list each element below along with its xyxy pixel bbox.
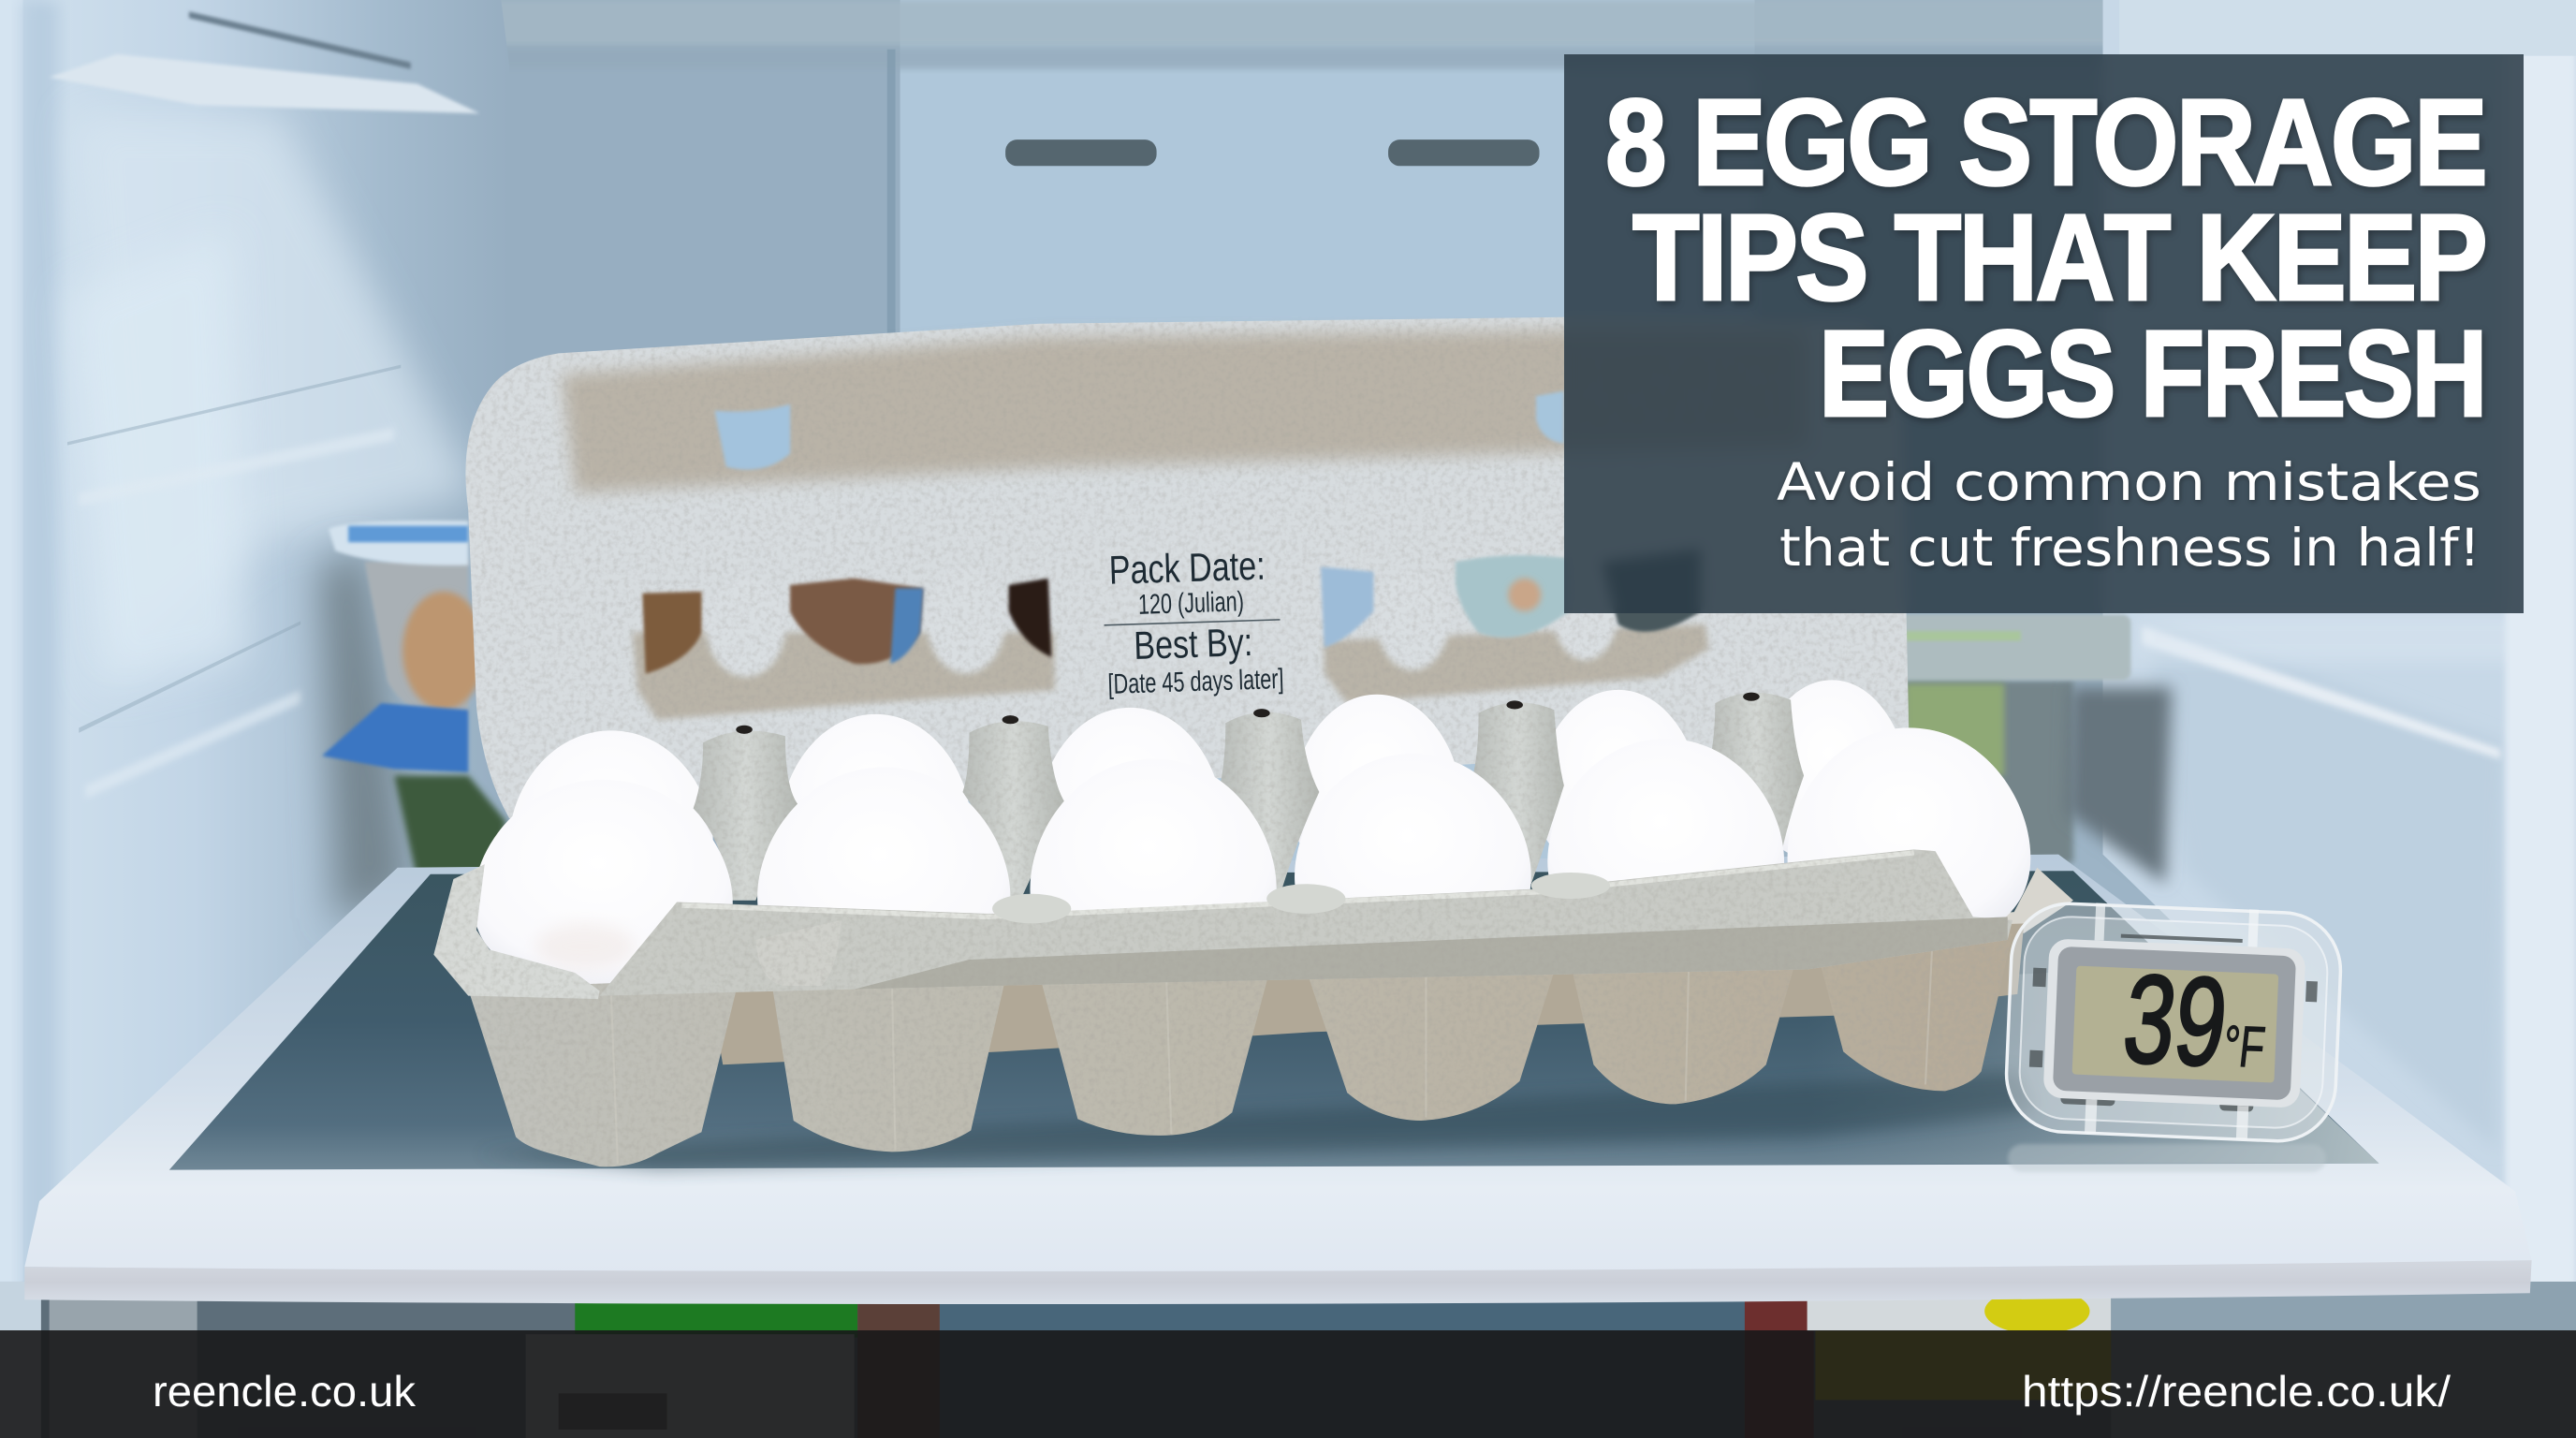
carton cone bumps [992,873,1610,923]
wall shadow behind containers [320,550,411,920]
subtitle: Avoid common mistakes [1777,452,2481,512]
footer right url: https://reencle.co.uk/ [2022,1367,2451,1416]
shelf top surface [24,855,2532,1272]
left food containers [320,521,506,920]
lcd screen [2072,966,2278,1083]
carton lid holes [642,391,1701,674]
container dark body [1902,681,2073,871]
cup seams [611,949,1932,1164]
wall shadow panel [2067,687,2172,884]
right fridge wall [2103,0,2576,1314]
container lid [1897,614,2130,681]
temperature reading: 39 [2117,949,2233,1093]
blue lid [322,703,468,772]
food in container [402,592,485,710]
left fridge wall [0,0,509,1299]
vertical clear clips [2085,902,2259,1139]
glass pane [169,871,2378,1170]
carton cones between eggs [694,693,1804,901]
glass container body [365,559,468,716]
clear plastic case [2004,902,2343,1143]
salad [1906,683,2004,775]
cone tip holes [736,693,1760,734]
date label on carton: 120 (Julian) [1137,586,1244,621]
thermometer reflection on glass [2008,1144,2326,1172]
footer bar [0,1330,2576,1438]
date label on carton: Pack Date: [1108,544,1266,594]
egg carton [433,317,2073,1167]
green salad [394,775,506,888]
case clips [2027,931,2320,1114]
below-shelf items [0,1282,2576,1438]
footer left site name: reencle.co.uk [153,1367,417,1416]
thermometer grey face [2053,946,2296,1100]
carton lid [465,317,1909,818]
carton connecting web [707,923,2024,1064]
title [1605,73,2485,442]
thermometer bezel [2043,938,2305,1108]
date label on carton: [Date 45 days later] [1107,664,1284,700]
digital fridge thermometer [2004,900,2343,1143]
title panel [1564,54,2524,613]
rear row of eggs [509,680,1909,917]
carton egg cups [468,933,2012,1167]
carton front rim [433,849,2012,999]
warm tint on front egg [535,923,634,970]
white scallops between windows [707,562,1618,677]
subtitle [1777,452,2481,578]
date label on carton: Best By: [1134,620,1253,668]
case inner highlight [2018,915,2329,1130]
front row of eggs [473,727,2030,987]
shelf front edge [24,1260,2532,1304]
rear right carton flange [1955,868,2073,933]
subtitle: that cut freshness in half! [1779,518,2481,578]
right food container [1897,614,2172,884]
air vent slots [1005,139,1540,166]
glass shelf with white frame [24,855,2532,1304]
carton shadow on glass [476,1071,2037,1170]
container lid [329,521,468,565]
temperature reading: °F [2219,1014,2268,1080]
date label on carton [1102,543,1284,700]
